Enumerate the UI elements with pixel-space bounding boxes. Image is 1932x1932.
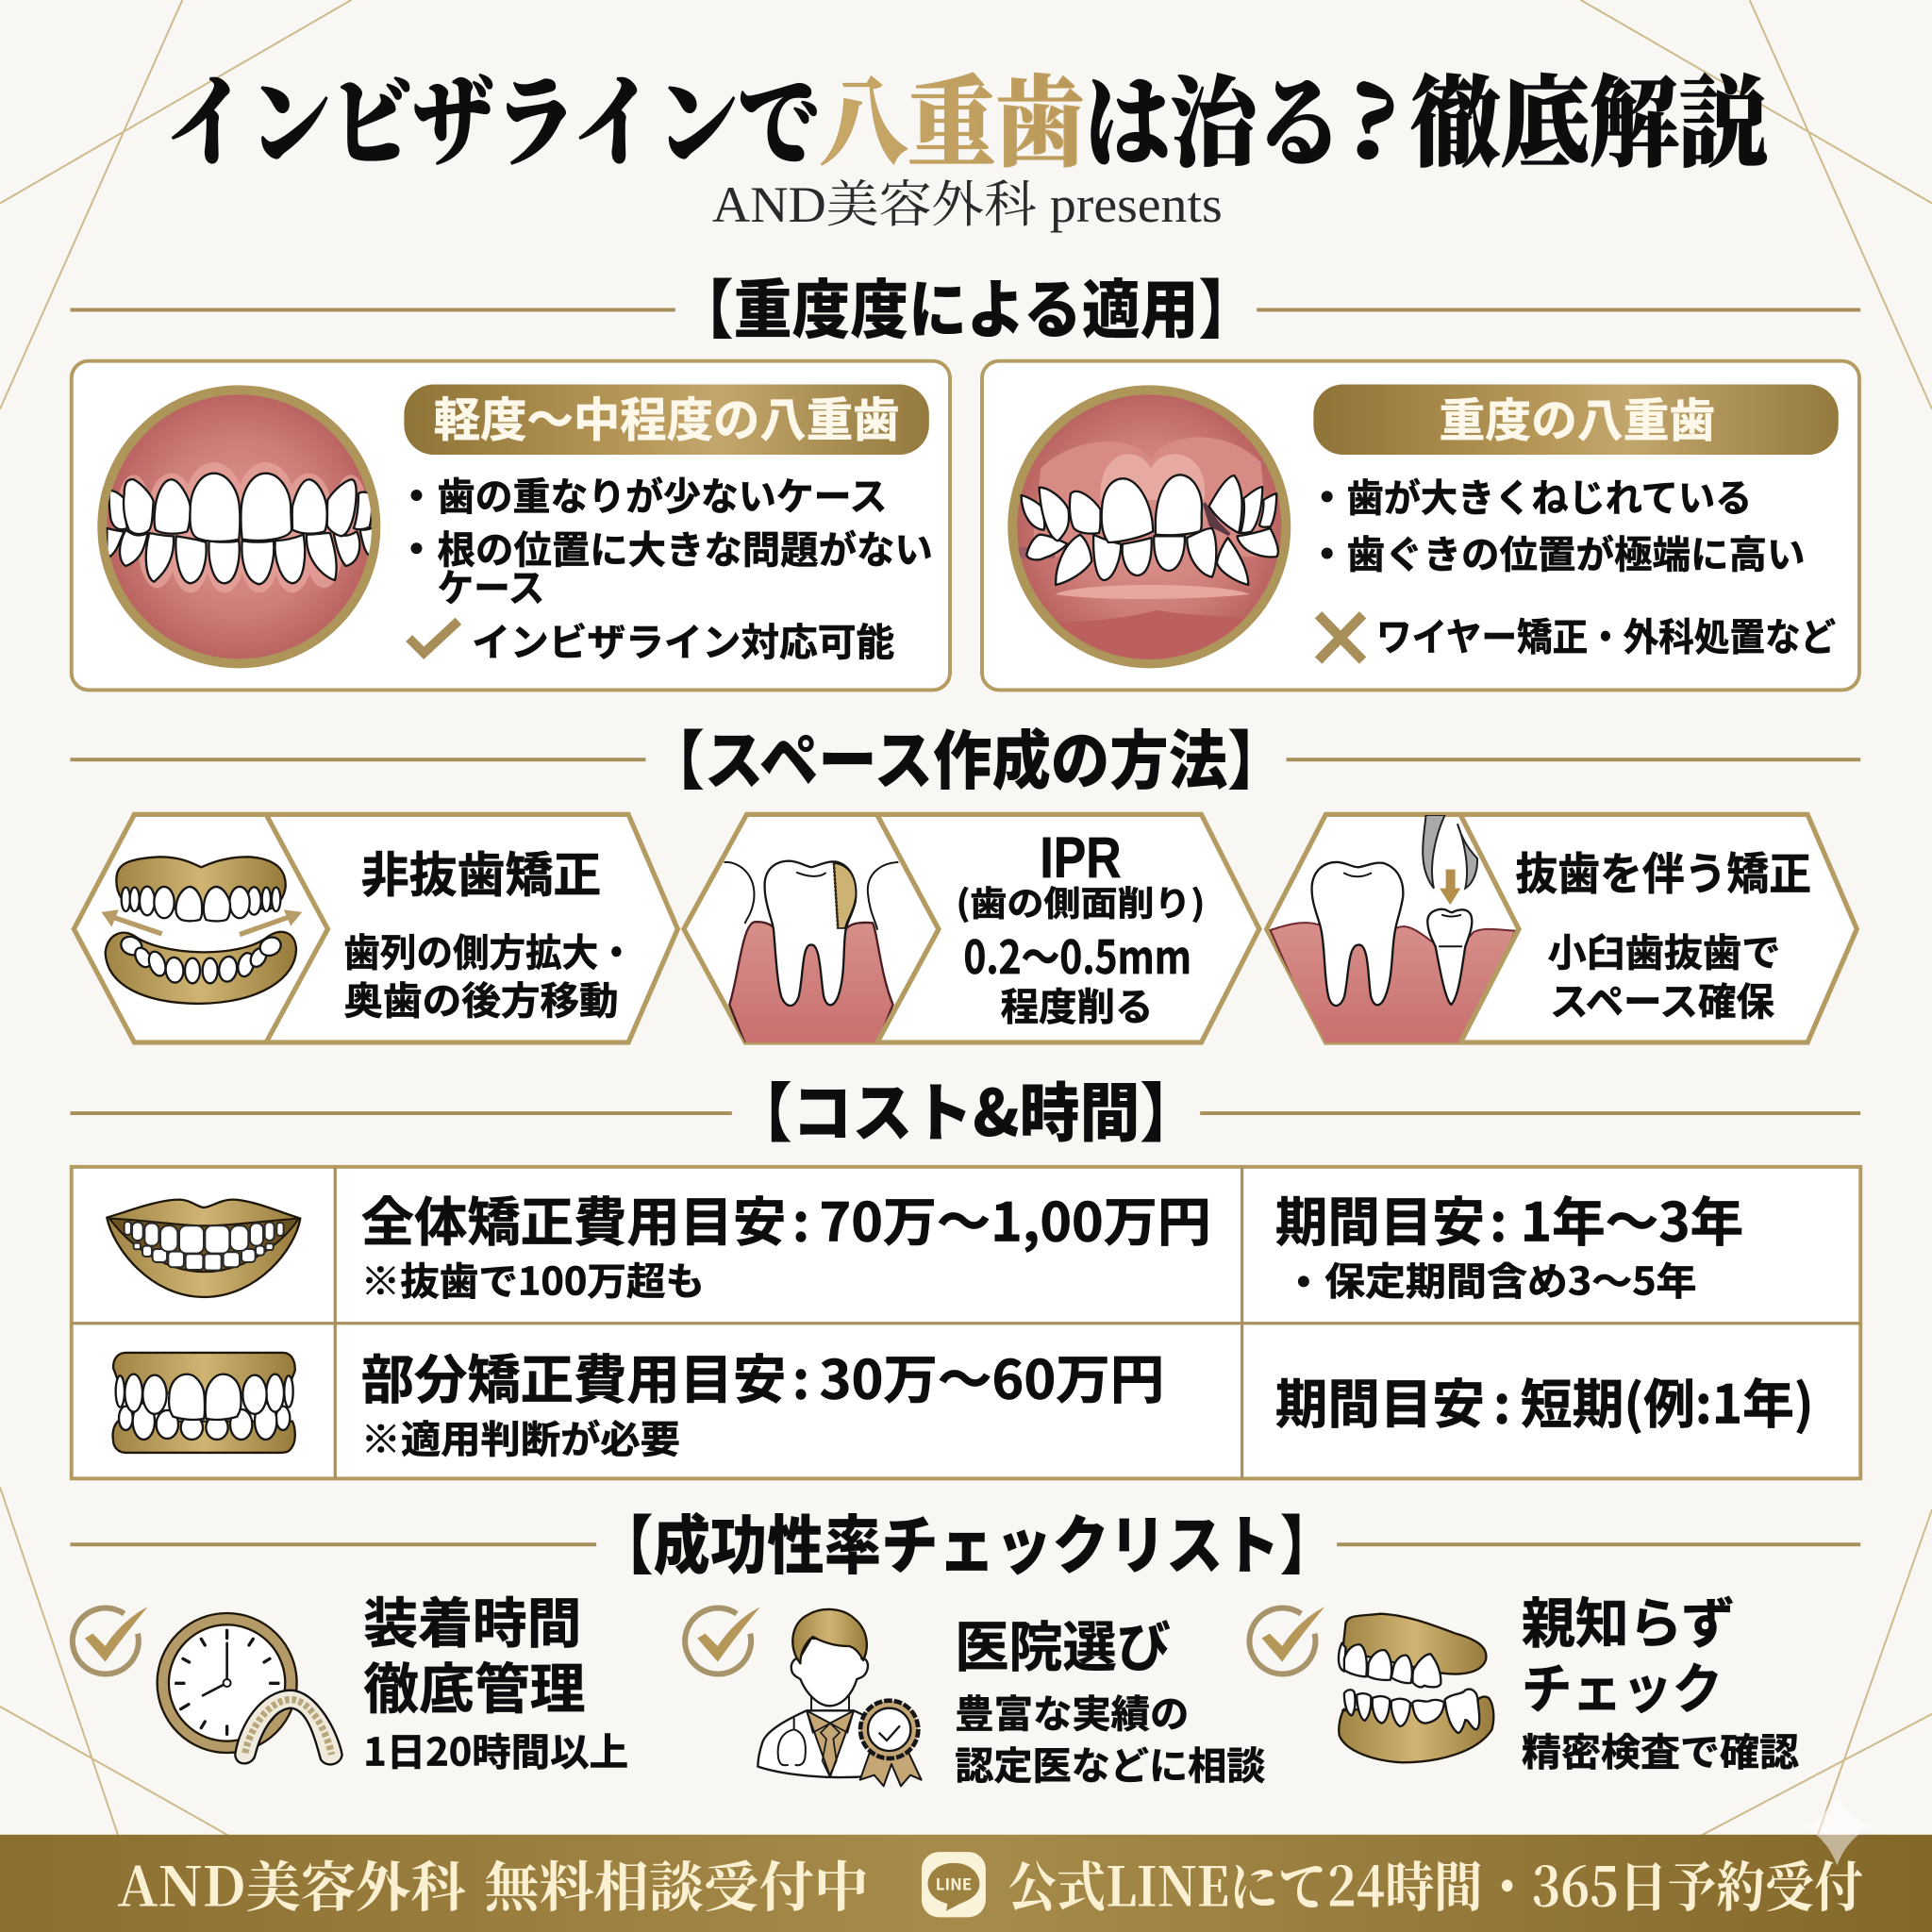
icon: extracting premolar [1271, 815, 1519, 1044]
text block [1522, 1579, 1799, 1777]
icon: expanding dental arch [102, 857, 301, 1004]
row 1 period: : [1490, 1180, 1507, 1257]
bullet list: 根の位置に大きな問題がない [438, 519, 933, 575]
row 1 period: 期間目安 [1275, 1180, 1485, 1257]
section heading: 成功性率チェックリスト: 【成功性率チェックリスト】 [596, 1494, 1337, 1588]
title: ? [1348, 44, 1400, 186]
row 2 period: : [1493, 1363, 1510, 1440]
text block: 奥歯の後方移動 [343, 970, 619, 1025]
row 1 period [1275, 1180, 1743, 1307]
row 1 cost [361, 1180, 1211, 1307]
checklist item: clinic choice [685, 1603, 1265, 1790]
text block: 親知らず [1522, 1579, 1735, 1658]
bullet list: 歯が大きくねじれている [1347, 467, 1752, 523]
footer left text: AND美容外科 [117, 1845, 466, 1923]
row 2 cost: : [792, 1338, 809, 1414]
row 1 cost: 全体矯正費用目安 [361, 1180, 786, 1257]
icon: smile [107, 1200, 300, 1297]
panel: IPR [684, 814, 1259, 1044]
text block [957, 825, 1205, 1031]
icon: check badge [685, 1607, 760, 1674]
icon: teeth with wisdom tooth [1339, 1614, 1493, 1762]
row 2 cost: ※適用判断が必要 [361, 1408, 680, 1464]
text block: 認定医などに相談 [955, 1735, 1265, 1790]
illustration: mild crowding teeth [102, 390, 375, 663]
section heading: 重度度による適用: 【重度度による適用】 [675, 258, 1257, 352]
footer right text: 公式LINEにて24時間・365日予約受付 [1008, 1845, 1863, 1923]
text block [363, 1579, 628, 1777]
title: 徹底解説 [1411, 44, 1768, 186]
pill label: 重度の八重歯 [1440, 383, 1715, 449]
text block: 医院選び [955, 1603, 1171, 1682]
bullet list: 歯の重なりが少ないケース [438, 466, 887, 522]
verdict: cross: ワイヤー矯正・外科処置など [1376, 607, 1836, 662]
title: 八重歯 [820, 44, 1084, 186]
row 1 period: 1年〜3年 [1521, 1180, 1743, 1257]
panel: non-extraction [74, 814, 677, 1042]
icon: doctor with rosette [758, 1609, 922, 1786]
panel: mild to moderate [72, 361, 950, 690]
text block: 装着時間 [363, 1579, 581, 1658]
text block [955, 1603, 1265, 1790]
panel: extraction [1267, 814, 1857, 1044]
row 1 period: 保定期間含め3〜5年 [1324, 1251, 1697, 1307]
text block: チェック [1522, 1644, 1723, 1724]
row 2 period [1275, 1363, 1814, 1440]
row 2 period: 短期(例:1年) [1521, 1363, 1814, 1440]
icon: clock and aligner [158, 1613, 342, 1764]
text block: 程度削る [1001, 975, 1154, 1031]
verdict: check: インビザライン対応可能 [472, 611, 894, 667]
panel: severe [982, 361, 1859, 690]
bullet list [410, 466, 933, 612]
text block: 抜歯を伴う矯正 [1516, 838, 1811, 903]
row 2 cost [361, 1338, 1164, 1464]
icon: teeth with gold gums [113, 1353, 295, 1453]
bullet list: ケース [438, 557, 544, 612]
pill label: 軽度〜中程度の八重歯 [434, 382, 899, 450]
icon: tooth with side shaved [724, 815, 939, 1044]
text block [343, 837, 635, 1025]
section heading: コスト&時間: 【コスト&時間】 [732, 1061, 1200, 1155]
text block: 0.2〜0.5mm [963, 921, 1191, 987]
icon: LINE [922, 1852, 986, 1917]
section heading: 成功性率チェックリスト [70, 1494, 1860, 1588]
row 1 cost: : [792, 1180, 809, 1257]
title: インビザラインで [166, 44, 820, 186]
text block: 非抜歯矯正 [361, 837, 601, 907]
section heading: スペース作成の方法: 【スペース作成の方法】 [645, 709, 1287, 803]
text block [1516, 838, 1811, 1026]
section heading: 重度度による適用 [70, 258, 1860, 352]
text block: 徹底管理 [363, 1644, 585, 1724]
footer left text [117, 1845, 869, 1923]
footer banner [0, 1787, 1932, 1932]
checklist item: wearing time [73, 1579, 628, 1777]
row 1 cost: 70万〜1,00万円 [820, 1180, 1211, 1257]
title [166, 44, 1768, 186]
text block: IPR [1040, 825, 1122, 891]
table: cost and time [72, 1167, 1860, 1478]
pill label [1313, 383, 1839, 455]
row 1 cost: ※抜歯で100万超も [361, 1251, 705, 1307]
icon: check badge [1249, 1607, 1324, 1674]
row 2 period: 期間目安 [1275, 1363, 1485, 1440]
illustration: severe crowding teeth [1012, 390, 1286, 667]
section heading: コスト&時間 [70, 1061, 1860, 1155]
bullet list: 歯ぐきの位置が極端に高い [1347, 524, 1805, 579]
text block: 精密検査で確認 [1522, 1722, 1799, 1777]
text block: (歯の側面削り) [957, 875, 1205, 925]
text block: 1日20時間以上 [363, 1722, 628, 1777]
icon: LINE: LINE [936, 1872, 972, 1895]
text block: 歯列の側方拡大・ [343, 922, 635, 977]
row 2 cost: 部分矯正費用目安 [361, 1338, 786, 1414]
bullet list [1322, 467, 1805, 579]
text block: スペース確保 [1550, 971, 1774, 1026]
text block: 豊富な実績の [955, 1683, 1189, 1739]
footer left text: 無料相談受付中 [484, 1845, 869, 1923]
checklist item: wisdom teeth [1249, 1579, 1799, 1777]
section heading: スペース作成の方法 [70, 709, 1860, 803]
subtitle: AND美容外科 presents [712, 176, 1223, 233]
row 2 cost: 30万〜60万円 [820, 1338, 1164, 1414]
icon: check badge [73, 1607, 148, 1674]
title: は治る [1084, 44, 1343, 186]
text block: 小臼歯抜歯で [1547, 922, 1780, 977]
